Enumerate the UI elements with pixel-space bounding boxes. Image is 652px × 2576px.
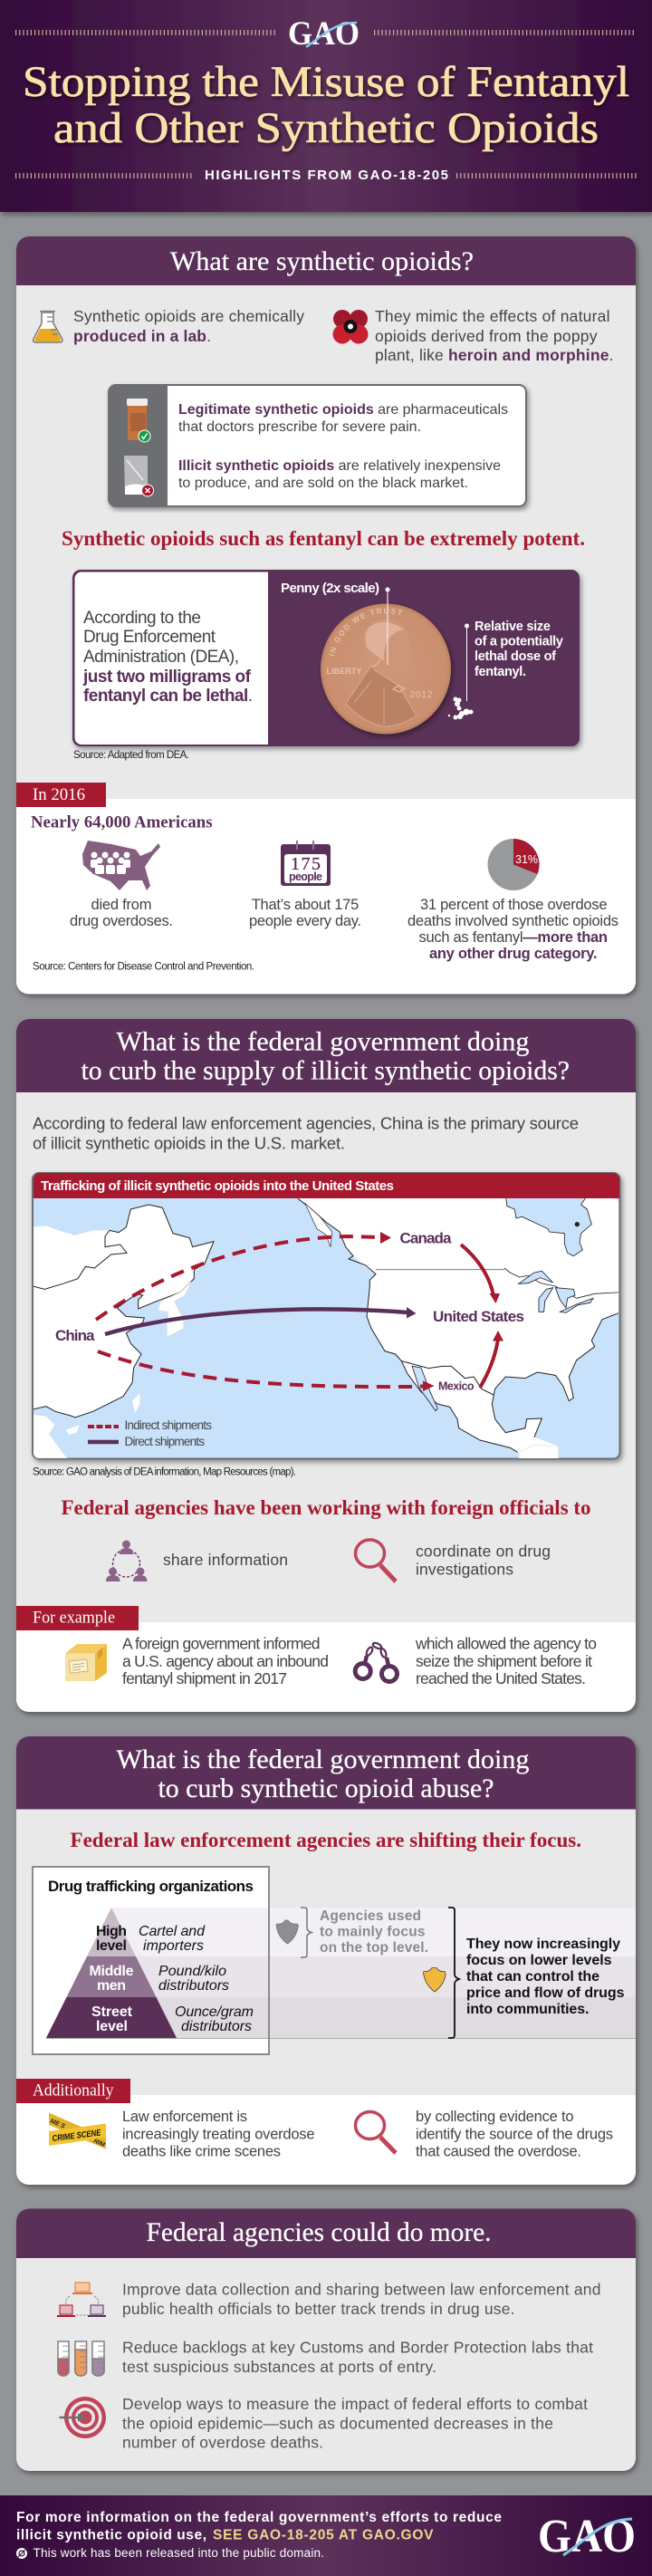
heading: What are synthetic opioids? xyxy=(170,246,474,276)
icon: test tubes xyxy=(58,2341,104,2376)
icon: penny: LIBERTY xyxy=(326,667,362,676)
icon: penny: IN GOD WE TRUST xyxy=(330,608,403,656)
level: street: distributors xyxy=(181,2019,252,2034)
fentanyl dose label: Relative size xyxy=(475,620,551,634)
text: lower levels: price and flow of drugs xyxy=(466,1985,625,2001)
text: 175 per day: That’s about 175 xyxy=(252,897,359,913)
source: Source: Adapted from DEA. xyxy=(73,750,189,761)
map labels: United States xyxy=(433,1308,524,1325)
heading: to curb synthetic opioid abuse? xyxy=(158,1773,494,1803)
icon: magnifying glass xyxy=(355,1540,396,1581)
fentanyl dose label: lethal dose of xyxy=(475,649,556,664)
level: street: Street xyxy=(91,2004,133,2020)
section: additionally xyxy=(16,2079,636,2185)
icon: calendar 175 people: 175 xyxy=(291,854,321,874)
text: legitimate: Legitimate synthetic opioids are pharmaceuticals xyxy=(178,402,508,418)
section: in 2016 xyxy=(16,783,636,995)
text: data collection xyxy=(122,2281,601,2318)
text: seize xyxy=(415,1634,597,1687)
icon: gold badge xyxy=(424,1967,446,1992)
title xyxy=(23,58,629,152)
penny label: Penny (2x scale) xyxy=(281,581,379,596)
map: land xyxy=(33,1196,622,1461)
panel: penny comparison xyxy=(71,569,585,752)
text: DEA lethal dose xyxy=(82,609,253,706)
text: DEA lethal dose: Drug Enforcement xyxy=(83,628,216,647)
penny label xyxy=(281,581,389,665)
icon: crime scene tape: RIM xyxy=(92,2138,106,2148)
icon: public domain xyxy=(16,2548,27,2559)
panel: what are synthetic opioids xyxy=(15,236,640,1000)
text: collecting evidence xyxy=(416,2109,613,2159)
heading: What is the federal government doing xyxy=(116,1027,529,1056)
map: Asia xyxy=(33,1205,214,1458)
heading: to curb the supply of illicit synthetic opioids? xyxy=(82,1056,570,1085)
text: natural opioids: They mimic the effects of natural xyxy=(375,307,610,325)
text: DEA lethal dose: According to the xyxy=(83,609,201,628)
icon: shipping box xyxy=(65,1644,107,1681)
heading xyxy=(116,1745,529,1803)
icon: crime scene tape: CRIME SCENE xyxy=(52,2128,101,2144)
text: agencies used xyxy=(320,1908,428,1956)
map labels: Canada xyxy=(400,1230,452,1246)
level: middle: distributors xyxy=(158,1978,229,1994)
diagram: drug trafficking pyramid xyxy=(33,1867,636,2054)
text: seize: reached the United States. xyxy=(416,1669,586,1687)
map labels xyxy=(55,1230,524,1393)
arrow: Mexico to United States xyxy=(480,1331,503,1388)
text: foreign government: fentanyl shipment in 2017 xyxy=(122,1669,287,1687)
heading: shifting focus: Federal law enforcement agencies are shifting their focus. xyxy=(71,1829,581,1851)
text: agencies used: to mainly focus xyxy=(320,1924,426,1940)
heading xyxy=(82,1027,570,1085)
icon: handcuffs xyxy=(355,1642,397,1681)
level: high xyxy=(96,1924,206,1954)
text: measure impact xyxy=(122,2395,588,2451)
text: 31 percent: deaths involved synthetic opioids xyxy=(408,913,618,929)
icon: share information xyxy=(106,1540,147,1581)
text: died: died from xyxy=(91,897,152,913)
text: lower levels: into communities. xyxy=(466,2002,589,2017)
map title bar xyxy=(34,1173,619,1198)
text: legitimate: that doctors prescribe for severe pain. xyxy=(178,419,421,435)
text: natural opioids xyxy=(375,307,614,364)
text: 175 per day xyxy=(249,897,361,929)
icon: crime scene tape xyxy=(49,2112,106,2148)
icon: penny: 2012 xyxy=(409,689,433,700)
text: backlogs: Reduce backlogs at key Customs and Border Protection labs that xyxy=(122,2339,593,2357)
icon: flask xyxy=(34,312,62,342)
legend: Direct shipments xyxy=(125,1435,205,1448)
fentanyl dose label: fentanyl. xyxy=(475,665,526,679)
icon: magnifying glass xyxy=(355,2112,396,2153)
text: illicit: to produce, and are sold on the black market. xyxy=(178,476,468,491)
footer text: For more information on the federal government’s efforts to reduce xyxy=(16,2510,502,2525)
text: died: drug overdoses. xyxy=(70,913,173,929)
text: data collection: public health officials to better track trends in drug use. xyxy=(122,2300,514,2318)
text: 31 percent: any other drug category. xyxy=(429,946,598,962)
icon: US map with people xyxy=(82,841,160,890)
text: DEA lethal dose: fentanyl can be lethal. xyxy=(83,687,253,706)
footer xyxy=(0,2495,652,2576)
text: agencies used: Agencies used xyxy=(320,1908,421,1924)
level: high: High xyxy=(96,1924,127,1939)
map labels: China xyxy=(55,1327,95,1344)
level: street: level xyxy=(96,2019,128,2034)
heading: Federal agencies could do more. xyxy=(147,2217,491,2247)
text: crime scenes: increasingly treating overdose xyxy=(122,2127,315,2143)
subtitle: HIGHLIGHTS FROM GAO-18-205 xyxy=(205,168,448,183)
tab label: Additionally xyxy=(33,2081,114,2100)
text: 31 percent: 31 percent of those overdose xyxy=(420,897,607,913)
arrow: China to Mexico xyxy=(98,1351,435,1391)
footer text xyxy=(16,2510,502,2543)
text: produced in a lab xyxy=(73,307,304,345)
icon: calendar 175 people: people xyxy=(289,870,322,883)
text: share information: share information xyxy=(163,1551,288,1569)
heading: 64,000: Nearly 64,000 Americans xyxy=(31,813,212,831)
panel: could do more xyxy=(16,2208,636,2471)
text: measure impact: the opioid epidemic—such as documented decreases in the xyxy=(122,2415,553,2433)
header banner xyxy=(0,0,652,212)
brace: top level xyxy=(301,1908,312,1957)
title: Stopping the Misuse of Fentanyl xyxy=(23,58,629,106)
tab label: In 2016 xyxy=(33,785,85,804)
level: middle: Middle xyxy=(89,1964,134,1979)
text: lower levels: They now increasingly xyxy=(466,1937,620,1952)
legend: Indirect shipments xyxy=(125,1418,212,1432)
level: high: level xyxy=(96,1938,127,1954)
arrow: China direct to United States xyxy=(105,1307,417,1334)
fentanyl dose label: of a potentially xyxy=(475,634,563,649)
footer text: illicit synthetic opioid use, xyxy=(16,2527,206,2543)
text: coordinate xyxy=(416,1542,551,1578)
level: street: Ounce/gram xyxy=(175,2004,254,2020)
text: legitimate xyxy=(178,402,508,435)
legend xyxy=(88,1418,212,1448)
text: DEA lethal dose: Administration (DEA), xyxy=(83,648,239,667)
text: China primary source: According to federal law enforcement agencies, China is the primary source xyxy=(33,1114,579,1132)
text: natural opioids: opioids derived from the poppy xyxy=(375,327,598,345)
text: foreign government xyxy=(122,1634,329,1687)
level: middle: Pound/kilo xyxy=(158,1964,226,1979)
text: crime scenes: Law enforcement is xyxy=(122,2109,247,2125)
diagram title: Drug trafficking organizations xyxy=(48,1878,254,1895)
section: for example xyxy=(16,1606,636,1712)
icon: grey badge xyxy=(276,1920,298,1944)
title: and Other Synthetic Opioids xyxy=(53,104,599,152)
map title bar: Trafficking of illicit synthetic opioids into the United States xyxy=(41,1178,394,1194)
text: lower levels xyxy=(466,1937,625,2017)
level: high: Cartel and xyxy=(139,1924,206,1939)
text: natural opioids: plant, like heroin and morphine. xyxy=(375,346,614,364)
text: coordinate: investigations xyxy=(416,1560,513,1578)
source: Source: Centers for Disease Control and Prevention. xyxy=(33,962,254,973)
text: illicit: Illicit synthetic opioids are relatively inexpensive xyxy=(178,458,501,474)
heading: foreign officials: Federal agencies have been working with foreign officials to xyxy=(62,1496,590,1519)
logo: GAO: GAO xyxy=(288,15,360,53)
map panel xyxy=(33,1173,622,1461)
text: measure impact: number of overdose deaths. xyxy=(122,2433,323,2451)
text: illicit xyxy=(178,458,501,491)
heading: What is the federal government doing xyxy=(116,1745,529,1774)
text: crime scenes xyxy=(122,2109,315,2159)
level: street xyxy=(91,2004,254,2034)
text: lower levels: that can control the xyxy=(466,1969,599,1985)
text: China primary source xyxy=(33,1114,579,1152)
text: collecting evidence: by collecting evidence to xyxy=(416,2109,574,2125)
brace: lower levels xyxy=(448,1908,459,2038)
map labels: Mexico xyxy=(438,1380,475,1393)
fentanyl dose label xyxy=(465,620,563,701)
icon: pie chart 31 percent xyxy=(487,839,540,890)
text: measure impact: Develop ways to measure the impact of federal efforts to combat xyxy=(122,2395,588,2413)
level: high: importers xyxy=(143,1938,204,1954)
text: died xyxy=(70,897,173,929)
icon: poppy xyxy=(333,310,368,344)
icon: calendar 175 people xyxy=(281,841,331,886)
text: DEA lethal dose: just two milligrams of xyxy=(82,668,252,687)
level: middle: men xyxy=(97,1978,126,1994)
icon: target xyxy=(60,2397,106,2438)
text: public domain: This work has been released into the public domain. xyxy=(33,2546,324,2560)
footer text: SEE GAO-18-205 AT GAO.GOV xyxy=(213,2527,434,2543)
tab label: For example xyxy=(33,1609,115,1627)
level: middle xyxy=(89,1964,229,1994)
icon: networked laptops xyxy=(57,2283,106,2317)
heading: extremely potent: Synthetic opioids such as fentanyl can be extremely potent. xyxy=(62,527,585,550)
icon: pill bottle xyxy=(127,399,150,442)
icon: penny xyxy=(321,603,455,739)
text: backlogs xyxy=(122,2339,593,2376)
text: 31 percent: such as fentanyl—more than xyxy=(418,929,608,946)
text: agencies used: on the top level. xyxy=(320,1940,428,1956)
text: collecting evidence: that caused the overdose. xyxy=(416,2143,581,2159)
text: coordinate: coordinate on drug xyxy=(416,1542,551,1560)
text: 31 percent xyxy=(408,897,618,962)
map: North America xyxy=(298,1196,622,1461)
icon: crime scene tape: ME S xyxy=(49,2118,66,2130)
text: lower levels: focus on lower levels xyxy=(466,1953,612,1968)
panel: curb abuse xyxy=(16,1736,636,2185)
text: collecting evidence: identify the source of the drugs xyxy=(416,2127,613,2143)
text: China primary source: of illicit synthetic opioids in the U.S. market. xyxy=(33,1134,345,1152)
icon: fentanyl powder xyxy=(448,697,473,719)
arrow: Canada to United States xyxy=(461,1245,500,1303)
text: seize: seize the shipment before it xyxy=(416,1652,592,1670)
text: foreign government: a U.S. agency about an inbound xyxy=(122,1652,329,1670)
text: crime scenes: deaths like crime scenes xyxy=(122,2143,281,2159)
text: data collection: Improve data collection and sharing between law enforcement and xyxy=(122,2281,601,2299)
text: 175 per day: people every day. xyxy=(249,913,361,929)
text: seize: which allowed the agency to xyxy=(415,1634,597,1652)
source: Source: GAO analysis of DEA information, Map Resources (map). xyxy=(33,1467,296,1478)
icon: powder bag xyxy=(124,456,154,496)
text: foreign government: A foreign government informed xyxy=(122,1634,321,1652)
text: produced in a lab: produced in a lab. xyxy=(73,327,211,345)
arrow: China to Canada xyxy=(96,1232,391,1320)
text: backlogs: test suspicious substances at ports of entry. xyxy=(122,2358,436,2376)
icon: pie chart 31 percent: 31% xyxy=(515,853,538,866)
panel: legitimate and illicit xyxy=(109,385,526,506)
text: produced in a lab: Synthetic opioids are chemically xyxy=(73,307,304,325)
panel: curb the supply xyxy=(16,1019,636,1712)
logo: GAO: GAO xyxy=(538,2511,636,2562)
